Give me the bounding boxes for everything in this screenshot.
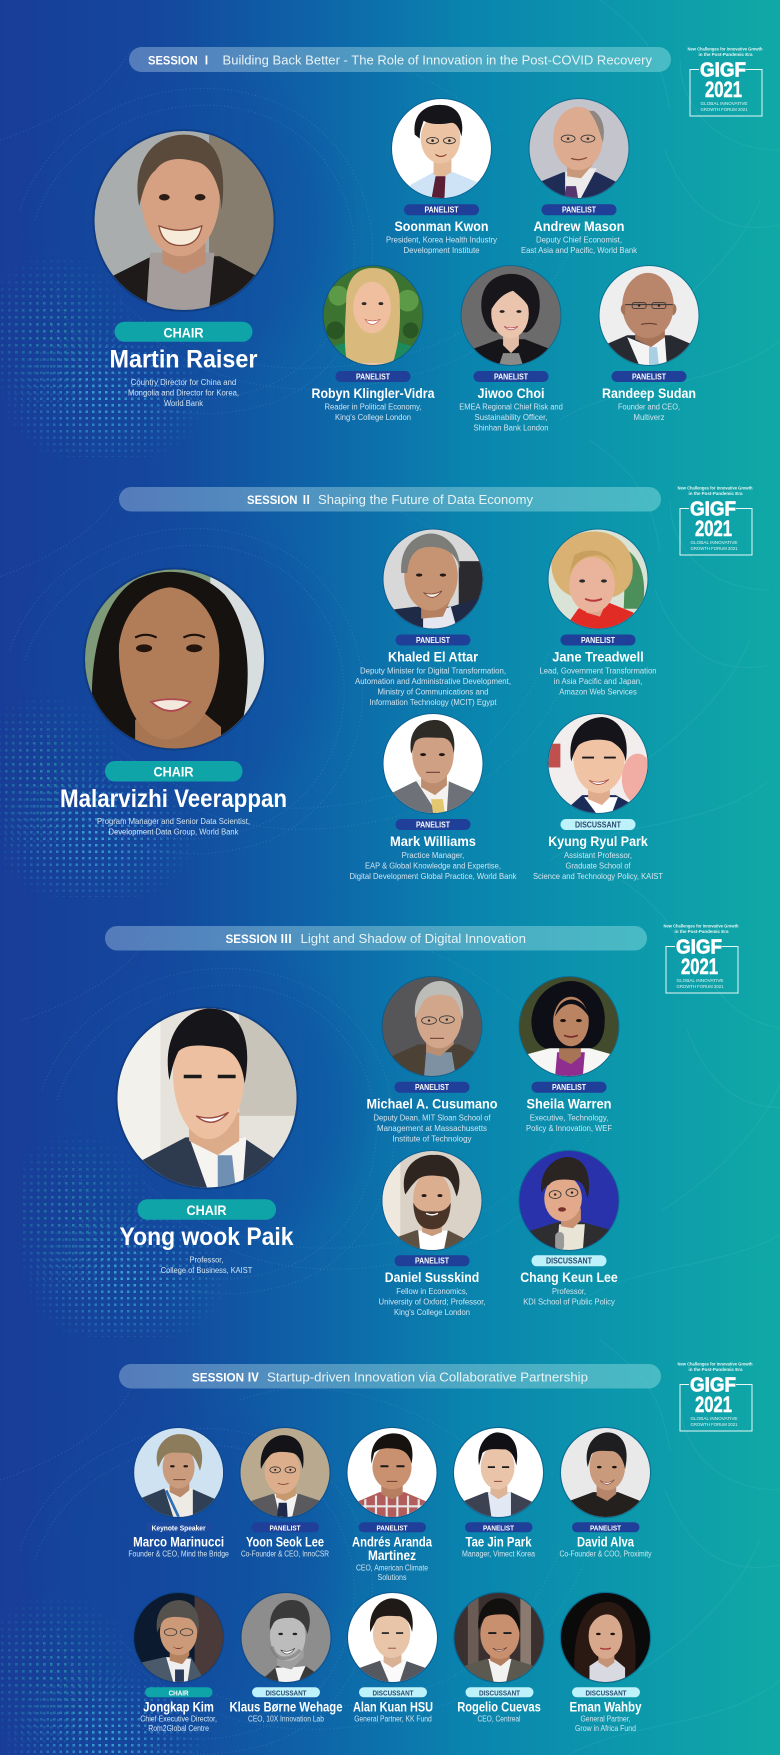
portrait: [520, 1151, 618, 1250]
affiliation: King's College London: [335, 413, 411, 422]
affiliation: Automation and Administrative Development,: [355, 677, 511, 686]
role badge: PANELIST: [581, 636, 615, 645]
name: Soonman Kwon: [394, 218, 488, 234]
logo: GIGF 2021: New Challenges for Innovative Growth: [678, 1362, 753, 1366]
speaker: Eman Wahby: [560, 1592, 651, 1733]
chair badge: [105, 761, 242, 782]
speaker: Marco Marinucci: [128, 1427, 229, 1559]
name: Alan Kuan HSU: [353, 1699, 433, 1715]
role badge: PANELIST: [590, 1523, 622, 1532]
affiliation: Ministry of Communications and: [378, 688, 488, 696]
affiliation: Sustainability Officer,: [474, 413, 548, 422]
speaker: Mark Williams: [350, 713, 517, 881]
chair badge: [138, 1199, 276, 1220]
chair affiliation: College of Business, KAIST: [161, 1266, 252, 1275]
affiliation: King's College London: [394, 1308, 470, 1317]
portrait: [134, 1593, 223, 1682]
affiliation: East Asia and Pacific, World Bank: [521, 246, 638, 255]
speaker: Andrew Mason: [521, 98, 638, 255]
speaker: Kyung Ryul Park: [533, 713, 663, 881]
panel: session 3: [105, 924, 739, 1317]
affiliation: EAP & Global Knowledge and Expertise,: [365, 862, 501, 870]
name: Sheila Warren: [526, 1096, 612, 1112]
affiliation: in Asia Pacific and Japan,: [554, 677, 642, 686]
affiliation: General Partner, KK Fund: [354, 1715, 432, 1724]
session 3 title bar: [105, 926, 647, 950]
logo: GIGF 2021: GLOBAL INNOVATIVE: [700, 101, 748, 106]
portrait: Malarvizhi Veerappan: [85, 570, 264, 748]
affiliation: [324, 402, 422, 422]
logo: GIGF 2021: New Challenges for Innovative Growth: [678, 486, 753, 490]
speaker: Jongkap Kim: [133, 1592, 224, 1733]
affiliation: Institute of Technology: [392, 1134, 472, 1144]
name: David Alva: [577, 1534, 634, 1550]
role badge: PANELIST: [270, 1523, 301, 1532]
portrait: [384, 530, 484, 628]
chair affiliation: World Bank: [164, 399, 204, 408]
speaker: Michael A. Cusumano: [366, 976, 498, 1144]
name: Jongkap Kim: [143, 1699, 214, 1715]
logo: GIGF 2021: 2021: [681, 954, 718, 979]
portrait: [548, 530, 648, 628]
logo: GIGF 2021: 2021: [705, 77, 742, 102]
role badge: CHAIR: [169, 1688, 189, 1697]
name: [352, 1534, 432, 1563]
affiliation: Multiverz: [634, 413, 664, 422]
logo: GIGF 2021: [678, 1362, 753, 1431]
role badge: PANELIST: [552, 1083, 586, 1092]
portrait: [240, 1428, 330, 1517]
affiliation: Deputy Minister for Digital Transformation,: [360, 666, 506, 676]
name: Klaus Børne Wehage: [230, 1699, 343, 1715]
affiliation: [618, 402, 680, 422]
logo: GIGF 2021: GLOBAL INNOVATIVE: [690, 1416, 738, 1421]
role badge: [532, 1255, 606, 1266]
logo: GIGF 2021: [688, 46, 763, 116]
affiliation: Professor,: [552, 1287, 586, 1296]
affiliation: [459, 402, 563, 432]
affiliation: President, Korea Health Industry: [386, 236, 497, 244]
speaker: Robyn Klingler-Vidra: [312, 265, 435, 422]
affiliation: KDI School of Public Policy: [523, 1298, 615, 1306]
session 4 title bar: SESSION Ⅳ: [192, 1370, 259, 1384]
speaker: David Alva: [560, 1427, 652, 1559]
role badge: PANELIST: [483, 1523, 515, 1532]
speaker: Randeep Sudan: [598, 265, 700, 422]
portrait: [600, 266, 698, 365]
logo: GIGF 2021: GROWTH FORUM 2021: [676, 984, 724, 989]
role badge: [612, 371, 686, 382]
portrait: Yong wook Paik: [118, 1007, 296, 1188]
chair badge: CHAIR: [186, 1202, 226, 1218]
name: Andrew Mason: [534, 218, 624, 234]
affiliation: CEO, Centreal: [478, 1715, 521, 1724]
portrait: [348, 1593, 437, 1682]
role badge: Keynote Speaker: [152, 1523, 206, 1532]
portrait: [561, 1428, 650, 1517]
affiliation: Practice Manager,: [402, 851, 464, 860]
role badge: [532, 1082, 606, 1093]
name: Rogelio Cuevas: [457, 1699, 541, 1715]
logo: GIGF 2021: GROWTH FORUM 2021: [690, 1422, 738, 1427]
panel: session 2: [60, 486, 753, 881]
portrait: [382, 1151, 482, 1250]
name: Khaled El Attar: [388, 648, 478, 664]
affiliation: Management at Massachusetts: [377, 1124, 487, 1133]
affiliation: [521, 236, 638, 255]
name: Daniel Susskind: [385, 1269, 479, 1285]
chair affiliation: Development Data Group, World Bank: [108, 828, 239, 836]
role badge: PANELIST: [415, 1257, 449, 1266]
portrait: [392, 99, 491, 198]
chair: Martin Raiser: [92, 129, 276, 408]
chair: Malarvizhi Veerappan: [60, 568, 287, 836]
chair affiliation: [161, 1256, 252, 1275]
role badge: PANELIST: [424, 206, 459, 215]
affiliation: Lead, Government Transformation: [540, 666, 656, 676]
affiliation: [575, 1715, 636, 1733]
affiliation: EMEA Regional Chief Risk and: [459, 402, 563, 412]
affiliation: [533, 851, 663, 881]
logo: GIGF 2021: 2021: [695, 516, 732, 541]
chair badge: CHAIR: [154, 764, 194, 780]
role badge: PANELIST: [416, 820, 450, 830]
affiliation: Solutions: [378, 1573, 406, 1582]
name: Michael A. Cusumano: [366, 1096, 498, 1112]
session 1 title bar: SESSION Ⅰ: [148, 54, 212, 68]
portrait: [548, 714, 653, 813]
logo: GIGF 2021: 2021: [695, 1392, 732, 1417]
affiliation: Policy & Innovation, WEF: [526, 1124, 612, 1133]
logo: GIGF 2021: in the Post-Pandemic Era: [688, 491, 743, 496]
role badge: PANELIST: [416, 636, 450, 645]
affiliation: Grow in Africa Fund: [575, 1724, 636, 1733]
portrait: [242, 1593, 330, 1682]
role badge: PANELIST: [562, 206, 596, 215]
role badge: [560, 634, 636, 646]
name: Kyung Ryul Park: [548, 833, 648, 849]
logo: GIGF 2021: GLOBAL INNOVATIVE: [690, 540, 738, 545]
role badge: PANELIST: [376, 1523, 408, 1532]
affiliation: Reader in Political Economy,: [324, 402, 422, 412]
portrait: [520, 977, 618, 1076]
chair affiliation: Mongolia and Director for Korea,: [128, 388, 239, 398]
speaker: Daniel Susskind: [378, 1150, 486, 1317]
affiliation: University of Oxford; Professor,: [378, 1298, 486, 1306]
affiliation: Deputy Chief Economist,: [536, 236, 622, 244]
portrait: Martin Raiser: [94, 131, 274, 310]
affiliation: General Partner,: [580, 1715, 630, 1724]
role badge: [404, 204, 479, 215]
speaker: Jiwoo Choi: [459, 265, 563, 432]
session 3 title bar: Light and Shadow of Digital Innovation: [300, 932, 526, 946]
logo: GIGF 2021: GROWTH FORUM 2021: [700, 107, 748, 112]
role badge: DISCUSSANT: [372, 1688, 414, 1697]
affiliation: [386, 236, 497, 255]
speaker: Sheila Warren: [518, 976, 620, 1133]
affiliation: [523, 1287, 615, 1306]
speaker: Soonman Kwon: [386, 98, 497, 255]
logo: GIGF 2021: GIGF: [690, 1374, 736, 1396]
role badge: DISCUSSANT: [575, 820, 621, 830]
panel: session 1: [92, 46, 763, 432]
session 3 title bar: SESSION Ⅲ: [226, 932, 292, 946]
role badge: [394, 1255, 470, 1266]
role badge: DISCUSSANT: [266, 1688, 307, 1697]
chair badge: [114, 322, 252, 342]
role badge: [474, 371, 548, 382]
chair name: Malarvizhi Veerappan: [60, 785, 287, 813]
session 2 title bar: [119, 487, 661, 512]
name: Mark Williams: [390, 833, 476, 849]
role badge: [358, 1522, 426, 1532]
name: Yoon Seok Lee: [246, 1534, 324, 1550]
logo: GIGF 2021: New Challenges for Innovative Growth: [664, 924, 739, 928]
portrait: [462, 266, 560, 365]
chair badge: CHAIR: [164, 324, 204, 340]
speaker: Chang Keun Lee: [518, 1150, 620, 1306]
portrait: [382, 977, 482, 1076]
role badge: [572, 1687, 640, 1697]
affiliation: CEO, American Climate: [356, 1564, 428, 1573]
chair affiliation: Country Director for China and: [131, 378, 236, 387]
logo: GIGF 2021: GIGF: [676, 936, 722, 958]
affiliation: [356, 1564, 428, 1582]
affiliation: Graduate School of: [566, 862, 631, 870]
name: Andrés Aranda: [352, 1534, 432, 1550]
affiliation: Development Institute: [404, 246, 480, 255]
affiliation: Manager, Vimect Korea: [462, 1550, 535, 1559]
portrait: [530, 99, 628, 198]
speaker: Yoon Seok Lee: [239, 1427, 331, 1559]
affiliation: [378, 1287, 486, 1317]
affiliation: [526, 1114, 612, 1133]
name: Jane Treadwell: [552, 648, 644, 664]
chair: Yong wook Paik: [116, 1006, 298, 1275]
session 4 title bar: [119, 1364, 661, 1388]
chair name: Martin Raiser: [110, 346, 258, 374]
session 1 title bar: Building Back Better - The Role of Innovation in the Post-COVID Recovery: [222, 54, 653, 68]
panel: session 4: [119, 1362, 753, 1733]
logo: GIGF 2021: GIGF: [690, 498, 736, 520]
role badge: DISCUSSANT: [479, 1688, 521, 1697]
chair name: Yong wook Paik: [120, 1223, 294, 1251]
name: Robyn Klingler-Vidra: [312, 385, 435, 401]
name: Eman Wahby: [570, 1699, 642, 1715]
speaker: Rogelio Cuevas: [453, 1592, 545, 1724]
speaker: Khaled El Attar: [355, 528, 511, 707]
affiliation: Fellow in Economics,: [396, 1287, 468, 1296]
name: Tae Jin Park: [466, 1534, 532, 1550]
session 2 title bar: Shaping the Future of Data Economy: [318, 493, 534, 507]
affiliation: Founder & CEO, Mind the Bridge: [128, 1550, 229, 1559]
affiliation: Co-Founder & COO, Proximity: [560, 1550, 652, 1559]
logo: GIGF 2021: GLOBAL INNOVATIVE: [676, 978, 724, 983]
affiliation: Assistant Professor,: [564, 851, 632, 860]
name: Marco Marinucci: [133, 1534, 224, 1550]
chair affiliation: [97, 817, 250, 836]
affiliation: Information Technology (MCIT) Egypt: [370, 698, 497, 707]
affiliation: Founder and CEO,: [618, 402, 680, 412]
role badge: PANELIST: [632, 372, 666, 382]
affiliation: Co-Founder & CEO, InnoCSR: [241, 1550, 329, 1559]
chair affiliation: Professor,: [190, 1256, 224, 1264]
speaker: Klaus Børne Wehage: [230, 1592, 343, 1724]
portrait: [454, 1428, 543, 1517]
portrait: [348, 1428, 436, 1517]
logo: GIGF 2021: GROWTH FORUM 2021: [690, 546, 738, 551]
chair affiliation: Program Manager and Senior Data Scientist,: [97, 817, 250, 826]
name: Martinez: [368, 1547, 416, 1563]
speaker: Andrés Aranda Martinez: [346, 1427, 438, 1582]
role badge: [336, 371, 410, 382]
role badge: PANELIST: [356, 372, 390, 382]
affiliation: Deputy Dean, MIT Sloan School of: [374, 1114, 491, 1122]
role badge: [396, 634, 470, 646]
role badge: [145, 1687, 212, 1697]
logo: GIGF 2021: GIGF: [700, 60, 746, 82]
affiliation: Chief Executive Director,: [140, 1715, 217, 1724]
affiliation: [540, 666, 656, 696]
portrait: [454, 1593, 544, 1682]
affiliation: [374, 1114, 491, 1144]
affiliation: [350, 851, 517, 881]
portrait: [134, 1428, 223, 1517]
logo: GIGF 2021: [678, 486, 753, 555]
role badge: DISCUSSANT: [586, 1688, 627, 1697]
role badge: [560, 819, 636, 830]
affiliation: Science and Technology Policy, KAIST: [533, 872, 663, 881]
name: Randeep Sudan: [602, 385, 696, 401]
logo: GIGF 2021: in the Post-Pandemic Era: [674, 929, 729, 934]
name: Jiwoo Choi: [478, 385, 544, 401]
speaker: Alan Kuan HSU: [347, 1592, 438, 1724]
logo: GIGF 2021: in the Post-Pandemic Era: [698, 52, 753, 57]
role badge: [542, 204, 616, 215]
chair affiliation: [128, 378, 239, 408]
role badge: [396, 819, 470, 830]
affiliation: [140, 1715, 217, 1733]
role badge: PANELIST: [415, 1083, 449, 1092]
portrait: [384, 714, 482, 813]
affiliation: Shinhan Bank London: [474, 424, 548, 432]
role badge: [394, 1082, 470, 1093]
affiliation: Amazon Web Services: [559, 688, 637, 696]
role badge: DISCUSSANT: [546, 1257, 592, 1266]
session 4 title bar: Startup-driven Innovation via Collaborative Partnership: [267, 1370, 588, 1384]
logo: GIGF 2021: in the Post-Pandemic Era: [688, 1367, 743, 1372]
session 2 title bar: SESSION Ⅱ: [247, 493, 312, 507]
logo: GIGF 2021: [664, 924, 739, 993]
speaker: Tae Jin Park: [453, 1427, 544, 1559]
portrait: [561, 1593, 650, 1682]
affiliation: Executive, Technology,: [530, 1114, 608, 1122]
affiliation: Rom2Global Centre: [148, 1724, 209, 1733]
role badge: PANELIST: [494, 372, 528, 382]
affiliation: [355, 666, 511, 707]
name: Chang Keun Lee: [520, 1269, 618, 1285]
session 1 title bar: [129, 47, 671, 72]
affiliation: CEO, 10X Innovation Lab: [248, 1715, 324, 1724]
logo: GIGF 2021: New Challenges for Innovative Growth: [688, 46, 763, 52]
speaker: Jane Treadwell: [540, 528, 656, 696]
portrait: [324, 266, 422, 365]
affiliation: Digital Development Global Practice, World Bank: [350, 872, 517, 881]
